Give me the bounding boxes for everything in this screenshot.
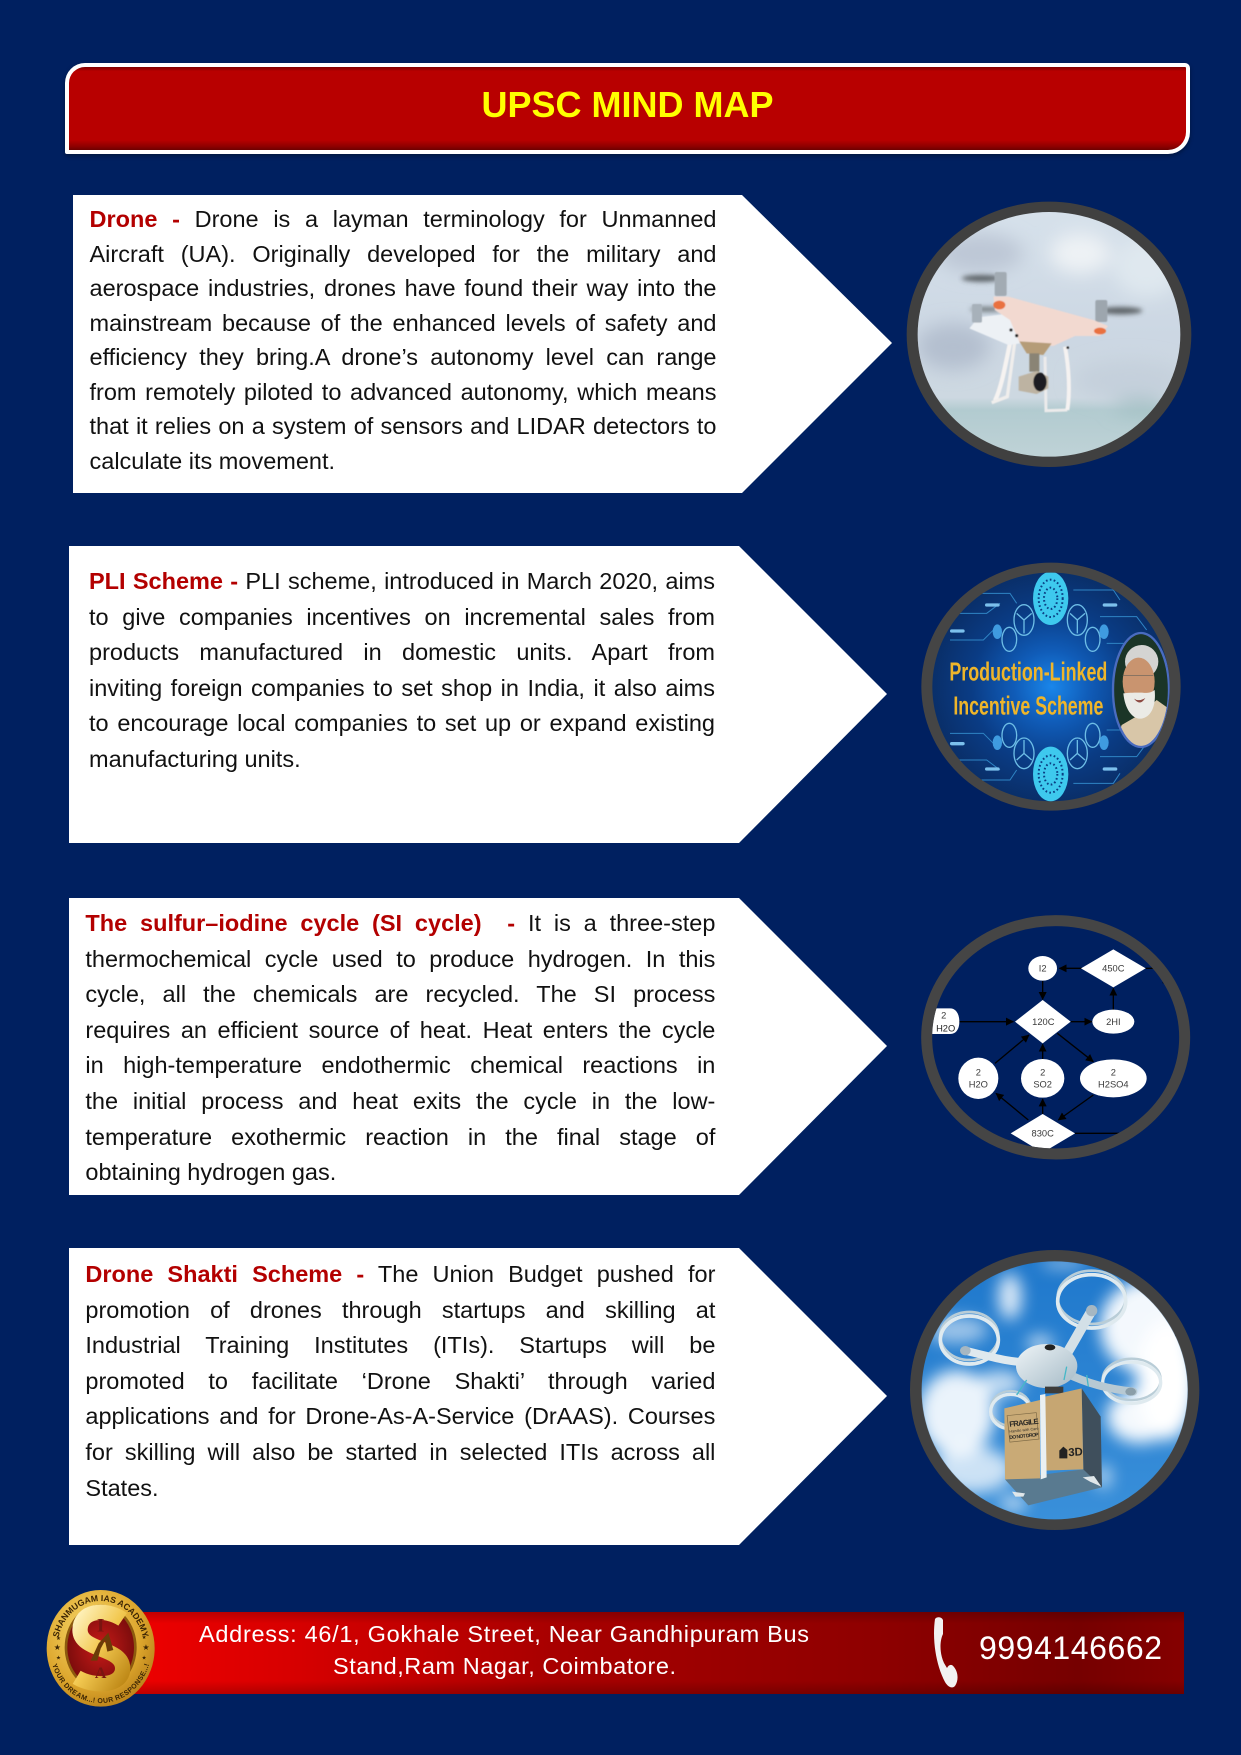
image: delivery drone carrying a fragile box in a round frame: 3D: [1068, 1446, 1083, 1459]
text: SI cycle definition: the initial process and heat exits the cycle in the low-: [85, 1088, 715, 1114]
text: drone definition: efficiency they bring.A drone’s autonomy level can range: [90, 344, 716, 370]
text: drone definition: calculate its movement.: [90, 448, 335, 474]
text: Drone Shakti definition: Drone Shakti Scheme - The Union Budget pushed for: [85, 1261, 715, 1287]
chart: sulfur-iodine cycle flow diagram in a round frame: [921, 915, 1190, 1160]
text: PLI scheme definition: to give companies incentives on incremental sales from: [89, 604, 715, 630]
text: PLI scheme definition: PLI Scheme - PLI scheme, introduced in March 2020, aims: [89, 568, 715, 594]
logo: Shanmugam IAS Academy badge: A: [95, 1665, 107, 1682]
chart: sulfur-iodine cycle flow diagram in a round frame: H2O: [969, 1080, 988, 1090]
text: address: Stand,Ram Nagar, Coimbatore.: [333, 1653, 676, 1679]
text: Drone Shakti definition: promotion of drones through startups and skilling at: [85, 1297, 715, 1323]
panel: Drone Shakti scheme: [69, 1248, 887, 1545]
text: drone definition: mainstream because of the enhanced levels of safety and: [90, 310, 716, 336]
chart: sulfur-iodine cycle flow diagram in a round frame: 2: [941, 1010, 946, 1020]
text: SI cycle definition: thermochemical cycle used to produce hydrogen. In this: [85, 946, 715, 972]
text: drone definition: [90, 210, 716, 469]
text: Drone Shakti definition: for skilling will also be started in selected ITIs across all: [85, 1439, 715, 1465]
chart: sulfur-iodine cycle flow diagram in a round frame: 2HI: [1106, 1017, 1121, 1027]
text: Drone Shakti definition: applications and for Drone-As-A-Service (DrAAS). Courses: [85, 1403, 715, 1429]
image: production-linked incentive scheme badge: Incentive Scheme: [953, 691, 1103, 721]
logo: Shanmugam IAS Academy badge: ★: [142, 1635, 147, 1641]
image: delivery drone carrying a fragile box in a round frame: FRAGILE: [1009, 1417, 1039, 1429]
text: PLI scheme definition: products manufactured in domestic units. Apart from: [89, 639, 715, 665]
chart: sulfur-iodine cycle flow diagram in a round frame: 2: [1040, 1068, 1045, 1078]
image: delivery drone carrying a fragile box in a round frame: Handle with Care: [1009, 1427, 1039, 1434]
text: SI cycle definition: The sulfur–iodine cycle (SI cycle) - It is a three-step: [85, 910, 715, 936]
icon: telephone handset: [934, 1617, 958, 1688]
text: address: [199, 1621, 809, 1679]
image: delivery drone carrying a fragile box in a round frame: DO NOT DROP: [1009, 1432, 1040, 1441]
text: SI cycle definition: obtaining hydrogen gas.: [85, 1159, 336, 1185]
text: drone definition: that it relies on a system of sensors and LIDAR detectors to: [90, 413, 716, 439]
panel: drone: [73, 195, 892, 493]
footer bar: [129, 1612, 1184, 1694]
image: quadcopter drone in a round frame: [906, 202, 1192, 467]
logo: Shanmugam IAS Academy badge: ★: [56, 1636, 61, 1642]
chart: sulfur-iodine cycle flow diagram in a round frame: I2: [1039, 964, 1047, 974]
text: PLI scheme definition: [89, 572, 714, 772]
image: delivery drone carrying a fragile box in a round frame: [910, 1250, 1200, 1530]
text: PLI scheme definition: manufacturing units.: [89, 746, 301, 772]
text: drone definition: Drone - Drone is a layman terminology for Unmanned: [90, 206, 716, 232]
chart: sulfur-iodine cycle flow diagram in a round frame: 120C: [1032, 1017, 1055, 1027]
logo: Shanmugam IAS Academy badge: ★: [142, 1655, 147, 1661]
chart: sulfur-iodine cycle flow diagram in a round frame: H2O: [936, 1023, 955, 1033]
text: drone definition: from remotely piloted to advanced autonomy, which means: [90, 378, 716, 404]
text: Drone Shakti definition: [86, 1265, 716, 1496]
text: SI cycle definition: requires an efficient source of heat. Heat enters the cycle: [85, 1017, 715, 1043]
text: SI cycle definition: [86, 914, 716, 1185]
text: SI cycle definition: in high-temperature endothermic chemical reactions in: [85, 1052, 715, 1078]
text: Drone Shakti definition: promoted to facilitate ‘Drone Shakti’ through varied: [85, 1368, 715, 1394]
logo: Shanmugam IAS Academy badge: ★: [142, 1643, 150, 1652]
logo: Shanmugam IAS Academy badge: [46, 1590, 155, 1707]
chart: sulfur-iodine cycle flow diagram in a round frame: 2: [1111, 1068, 1116, 1078]
text: phone number: 9994146662: [979, 1630, 1162, 1666]
text: SI cycle definition: temperature exothermic reaction in the final stage of: [85, 1124, 715, 1150]
text: Drone Shakti definition: States.: [85, 1475, 159, 1501]
chart: sulfur-iodine cycle flow diagram in a round frame: H2SO4: [1098, 1080, 1129, 1090]
chart: sulfur-iodine cycle flow diagram in a round frame: 450C: [1102, 964, 1125, 974]
text: Drone Shakti definition: Industrial Training Institutes (ITIs). Startups will be: [85, 1332, 715, 1358]
text: SI cycle definition: cycle, all the chemicals are recycled. The SI process: [85, 981, 715, 1007]
panel: sulfur-iodine cycle: [69, 898, 887, 1195]
logo: Shanmugam IAS Academy badge: SHANMUGAM IAS ACADEMY: [53, 1595, 149, 1638]
logo: Shanmugam IAS Academy badge: ★: [54, 1643, 61, 1652]
panel: PLI scheme: [69, 546, 887, 843]
text: drone definition: Aircraft (UA). Originally developed for the military and: [90, 240, 716, 266]
text: drone definition: aerospace industries, drones have found their way into the: [90, 275, 716, 301]
text: address: Address: 46/1, Gokhale Street, Near Gandhipuram Bus: [199, 1621, 809, 1647]
text: PLI scheme definition: to encourage local companies to set up or expand existing: [89, 710, 715, 736]
image: production-linked incentive scheme badge: Production-Linked: [949, 657, 1107, 687]
title banner: [65, 63, 1190, 154]
image: production-linked incentive scheme badge: [921, 562, 1181, 811]
logo: Shanmugam IAS Academy badge: I: [97, 1616, 104, 1637]
logo: Shanmugam IAS Academy badge: ★: [56, 1655, 61, 1661]
title banner: UPSC MIND MAP: [481, 84, 774, 125]
text: PLI scheme definition: inviting foreign companies to set shop in India, it also aims: [89, 675, 715, 701]
logo: Shanmugam IAS Academy badge: YOUR DREAM...! OUR RESPONSE...!: [52, 1663, 149, 1704]
chart: sulfur-iodine cycle flow diagram in a round frame: 830C: [1032, 1128, 1054, 1138]
chart: sulfur-iodine cycle flow diagram in a round frame: 2: [976, 1068, 981, 1078]
chart: sulfur-iodine cycle flow diagram in a round frame: SO2: [1033, 1080, 1052, 1090]
